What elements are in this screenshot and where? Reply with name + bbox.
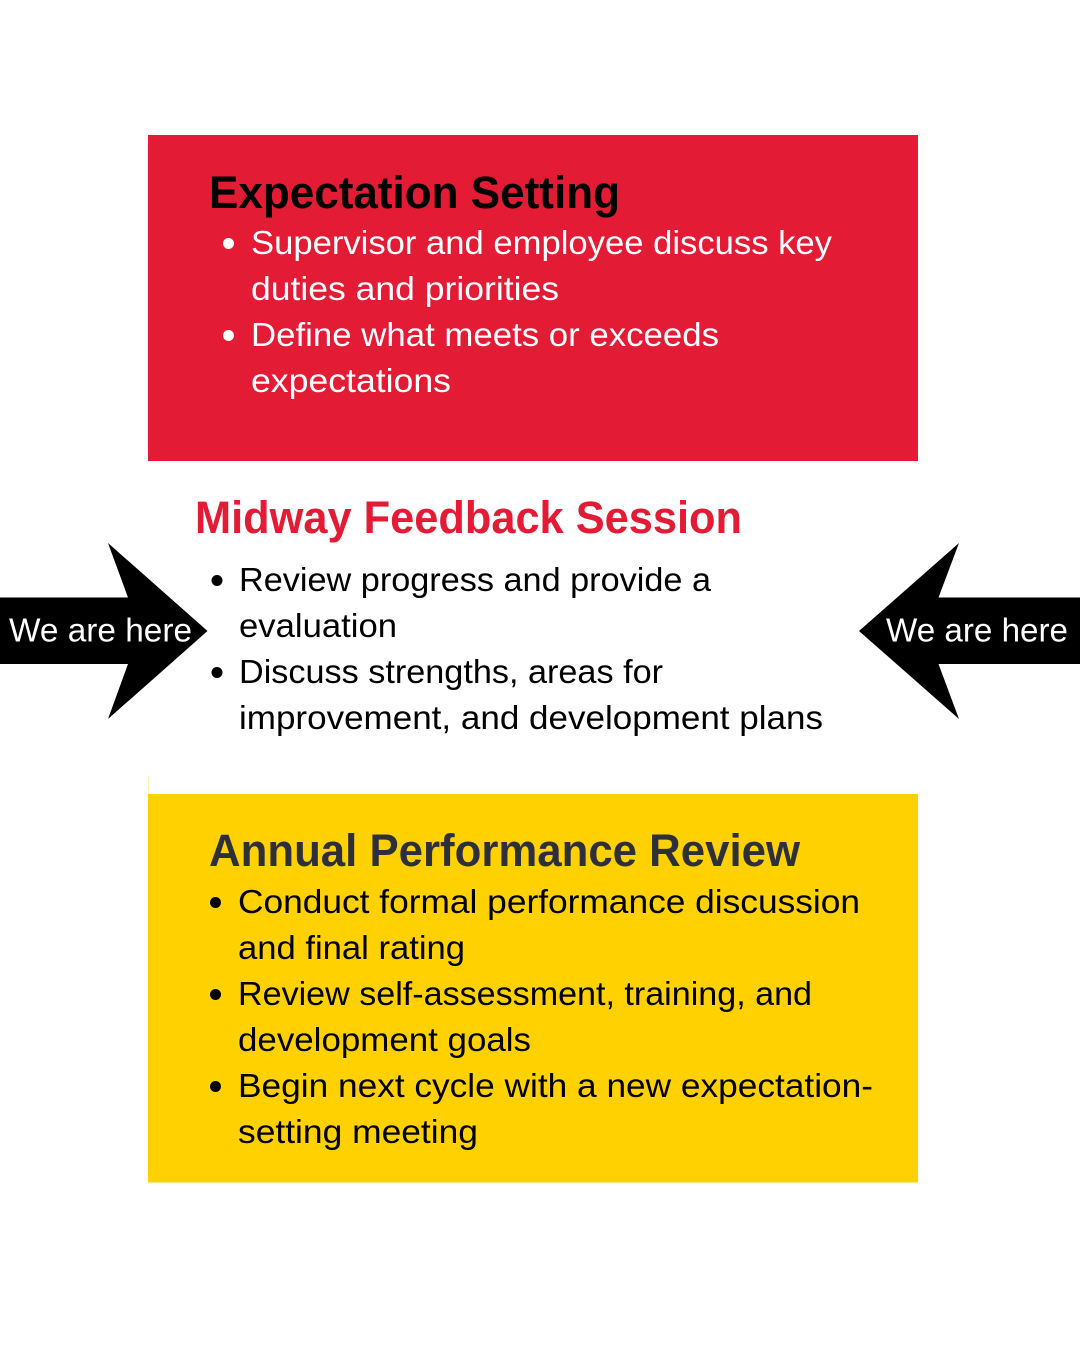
bullet list: expectation setting bbox=[223, 224, 833, 399]
panel: expectation setting bbox=[148, 135, 918, 461]
bullet list: expectation setting: duties and priorities bbox=[251, 270, 559, 307]
bullet list: expectation setting: Supervisor and employee discuss key bbox=[251, 224, 833, 261]
bullet list: annual review bbox=[210, 883, 873, 1150]
bullet list: expectation setting: expectations bbox=[251, 362, 451, 399]
arrow: left we are here: We are here bbox=[9, 612, 192, 648]
bullet list: midway feedback: improvement, and development plans bbox=[239, 699, 823, 736]
bullet list: annual review: development goals bbox=[238, 1021, 531, 1058]
panel: annual performance review bbox=[148, 794, 918, 1182]
bullet list: annual review: and final rating bbox=[238, 929, 465, 966]
heading: expectation setting: Expectation Setting bbox=[209, 167, 620, 218]
bullet list: midway feedback: Review progress and provide a bbox=[239, 561, 712, 598]
arrow: left we are here bbox=[0, 543, 208, 719]
bullet list: annual review: Review self-assessment, training, and bbox=[238, 975, 812, 1012]
bullet list: annual review: Begin next cycle with a new expectation- bbox=[238, 1067, 873, 1104]
bullet list: annual review: setting meeting bbox=[238, 1113, 478, 1150]
heading: midway feedback session: Midway Feedback Session bbox=[195, 492, 742, 543]
bullet list: midway feedback: Discuss strengths, areas for bbox=[239, 653, 663, 690]
bullet list: expectation setting: Define what meets or exceeds bbox=[251, 316, 719, 353]
heading: annual performance review: Annual Performance Review bbox=[209, 825, 801, 876]
bullet list: annual review: Conduct formal performance discussion bbox=[238, 883, 860, 920]
bullet list: midway feedback bbox=[212, 561, 823, 736]
panel: midway feedback session bbox=[195, 492, 823, 736]
bullet list: midway feedback: evaluation bbox=[239, 607, 397, 644]
arrow: right we are here bbox=[859, 543, 1080, 719]
arrow: right we are here: We are here bbox=[886, 612, 1068, 648]
